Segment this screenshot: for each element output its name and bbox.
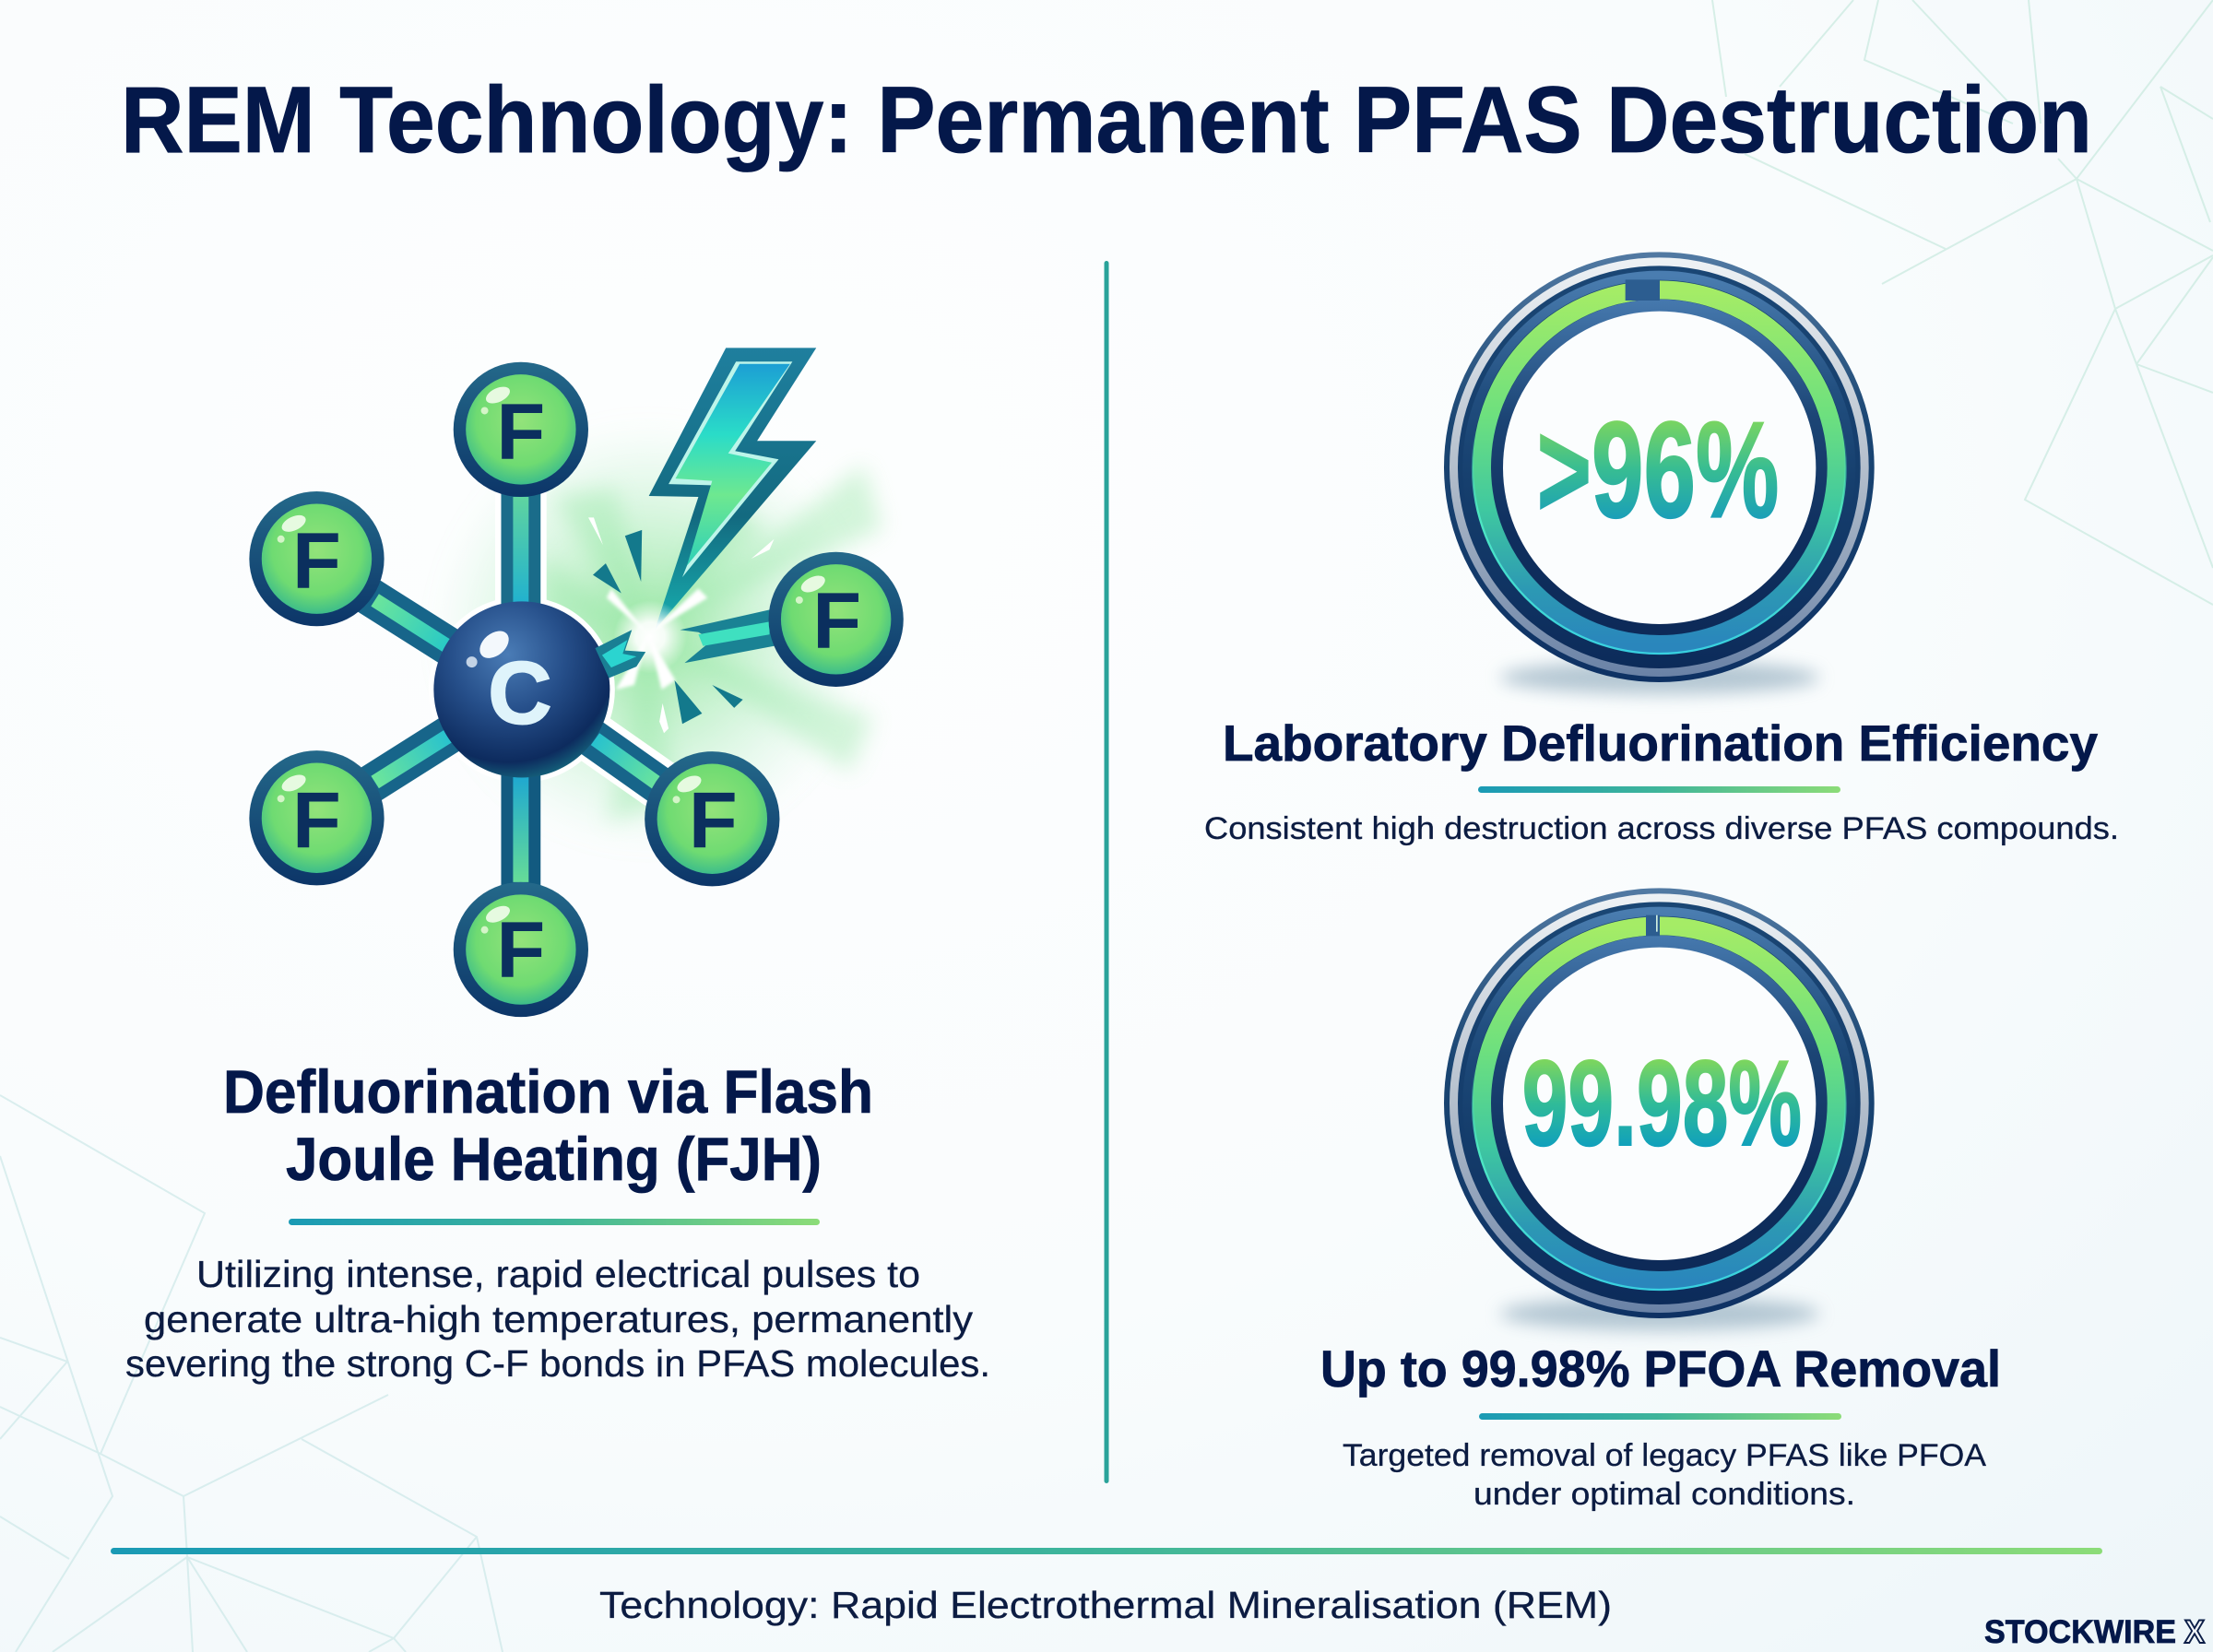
broken bond left stub [595,630,645,678]
bonds [368,490,667,889]
fluorine atom lower left: F [292,777,341,866]
first metric underline [1478,786,1840,793]
gauge value: 99.98% [1522,1035,1802,1171]
carbon atom [433,601,609,777]
gauge: greater than 96 percent [1444,252,1875,694]
energy burst glow [432,419,882,850]
left heading: Defluorination via Flash [223,1057,873,1126]
brand logo: X [2184,1614,2206,1650]
brand logo: STOCKWIRE [1984,1614,2176,1650]
fluorine atom upper left [249,491,385,626]
left heading: Joule Heating (FJH) [286,1125,822,1193]
left description [125,1253,990,1385]
second metric description: Targeted removal of legacy PFAS like PFOA [1343,1438,1986,1473]
left description: generate ultra-high temperatures, permanently [144,1298,974,1340]
gauge ring [1444,888,1875,1318]
broken bond right stub [680,609,774,663]
fluorine atom top: F [496,388,545,477]
lightning bolt [649,348,816,630]
central flash [607,588,707,690]
left description: Utilizing intense, rapid electrical pulses to [196,1253,920,1295]
carbon atom: C [488,644,551,742]
fluorine atom upper left: F [292,517,341,606]
second metric description [1343,1438,1986,1512]
fluorine atom bottom [454,882,588,1017]
gauge shadow [1500,1297,1819,1330]
second metric description: under optimal conditions. [1473,1477,1855,1512]
left heading [223,1057,873,1193]
gauge ring [1444,252,1875,682]
fluorine atom top [454,362,588,497]
footer rule [111,1548,2102,1554]
second metric underline [1479,1413,1841,1420]
fluorine atom right, detached [769,552,904,687]
fluorine atom lower right [645,751,779,886]
fluorine atom lower right: F [689,777,738,866]
gauge value: >96% [1537,395,1779,547]
second metric heading: Up to 99.98% PFOA Removal [1320,1339,2001,1398]
fluorine atom right, detached: F [812,577,861,666]
left heading underline [289,1219,820,1225]
fluorine atom bottom: F [496,906,545,995]
gauge: 99.98 percent [1444,888,1875,1330]
left description: severing the strong C-F bonds in PFAS molecules. [125,1342,990,1385]
gauge shadow [1500,661,1819,694]
footer technology line: Technology: Rapid Electrothermal Mineralisation (REM) [599,1584,1612,1626]
fluorine atom lower left [249,750,385,885]
first metric description: Consistent high destruction across diverse PFAS compounds. [1204,811,2119,846]
vertical divider [1105,261,1108,1483]
shards [588,517,774,733]
white halo around bonds and carbon [434,488,662,785]
molecule illustration: C-F bond being broken [249,348,904,1017]
title: REM Technology: Permanent PFAS Destruction [121,67,2092,172]
first metric heading: Laboratory Defluorination Efficiency [1223,714,2098,772]
